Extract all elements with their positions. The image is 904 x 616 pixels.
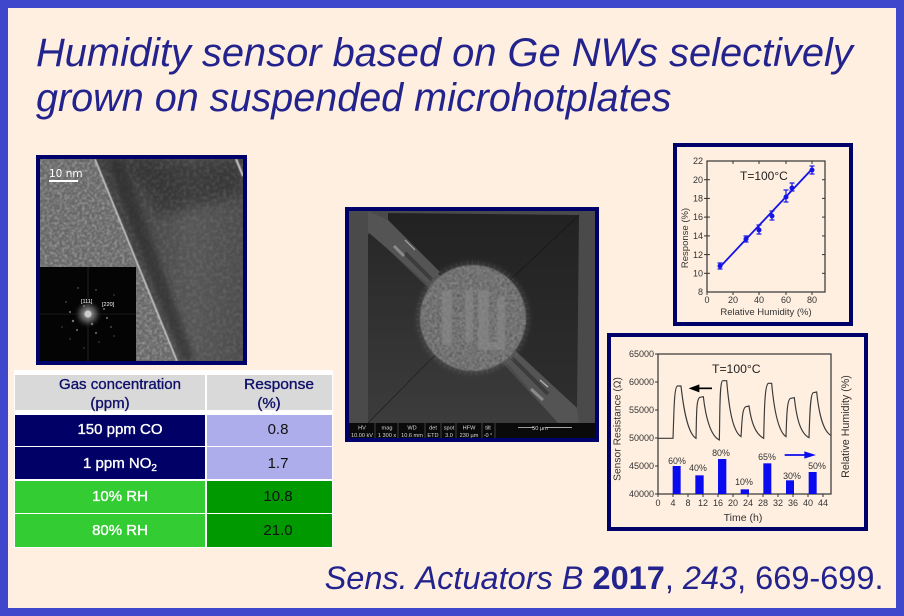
data bar: det xyxy=(429,426,437,432)
x axis title: Time (h) xyxy=(724,512,762,524)
x axis tick labels: 0 xyxy=(704,295,710,305)
x axis tick labels: 4 xyxy=(670,498,676,508)
data bar: HV xyxy=(358,426,366,432)
data bar: ETD xyxy=(427,433,439,439)
row: 1 ppm NO2: 2 xyxy=(151,463,157,474)
x axis tick labels: 16 xyxy=(713,498,723,508)
row: 150 ppm CO xyxy=(15,415,332,446)
data bar: mag xyxy=(382,426,392,432)
bar labels: 30% xyxy=(783,471,801,481)
x axis tick labels: 36 xyxy=(788,498,798,508)
humidity bars xyxy=(673,459,817,494)
data bar: 50 µm xyxy=(532,426,548,432)
row: 1 ppm NO2 xyxy=(15,447,332,479)
chart annotation: T=100°C xyxy=(712,362,761,376)
row: 150 ppm CO: 0.8 xyxy=(268,421,288,438)
data bar: -0 ° xyxy=(484,433,492,439)
x axis tick labels: 12 xyxy=(698,498,708,508)
table header: Gas concentration xyxy=(59,376,181,393)
y axis tick labels: 18 xyxy=(693,194,703,204)
left y axis title: Sensor Resistance (Ω) xyxy=(612,377,624,481)
x axis tick labels: 20 xyxy=(728,498,738,508)
y axis title: Response (%) xyxy=(680,208,691,268)
y axis tick labels: 16 xyxy=(693,212,703,222)
x axis tick labels: 44 xyxy=(818,498,828,508)
bar labels: 80% xyxy=(712,448,730,458)
bar labels: 65% xyxy=(758,452,776,462)
scale bar: 10 nm xyxy=(49,168,83,180)
data bar: 1 300 x xyxy=(378,433,396,439)
x axis tick labels: 0 xyxy=(655,498,661,508)
dark nanowire region xyxy=(95,159,243,361)
y axis tick labels: 65000 xyxy=(629,349,654,359)
row: 10% RH: 10% RH xyxy=(92,488,148,505)
y axis tick labels: 60000 xyxy=(629,377,654,387)
chart plot area xyxy=(680,156,825,318)
x axis tick labels xyxy=(704,295,817,305)
x axis tick labels: 20 xyxy=(728,295,738,305)
data bar: 3.0 xyxy=(445,433,453,439)
data bar: tilt xyxy=(485,426,491,432)
data bar: spot xyxy=(444,426,455,432)
y axis tick labels: 10 xyxy=(693,268,703,278)
row: 80% RH xyxy=(15,514,332,547)
y axis tick labels: 55000 xyxy=(629,405,654,415)
bar labels xyxy=(668,448,826,487)
x axis tick labels: 8 xyxy=(685,498,691,508)
title: Humidity sensor based on Ge NWs selectively xyxy=(36,31,855,75)
x axis tick labels: 60 xyxy=(781,295,791,305)
x axis tick labels: 32 xyxy=(773,498,783,508)
y axis tick labels: 20 xyxy=(693,175,703,185)
panel: response vs relative humidity chart xyxy=(675,145,851,324)
y axis tick labels xyxy=(693,156,703,297)
table: gas response xyxy=(14,370,333,548)
title: grown on suspended microhotplates xyxy=(36,76,671,120)
row: 1 ppm NO2: 1.7 xyxy=(268,455,288,472)
data bar: 10.00 kV xyxy=(351,433,373,439)
y axis tick labels: 22 xyxy=(693,156,703,166)
interdigitated electrodes xyxy=(442,290,505,350)
disc xyxy=(419,264,527,372)
diffraction inset: [220] xyxy=(102,302,115,308)
table header: Response xyxy=(244,376,314,393)
bar labels: 10% xyxy=(735,477,753,487)
row: 80% RH: 21.0 xyxy=(263,522,293,539)
window: upper right xyxy=(388,213,579,408)
table header: (ppm) xyxy=(90,395,130,412)
left arrow xyxy=(689,384,712,392)
y axis tick labels: 14 xyxy=(693,231,703,241)
panel: sensor resistance vs time chart xyxy=(609,335,866,529)
row: 1 ppm NO2: 1 ppm NO xyxy=(83,455,151,472)
x axis tick labels: 40 xyxy=(754,295,764,305)
dark band along wire edge xyxy=(106,159,195,361)
y axis tick labels: 12 xyxy=(693,250,703,260)
y axis tick labels: 45000 xyxy=(629,461,654,471)
data bar: WD xyxy=(407,426,417,432)
plot frame xyxy=(658,354,831,494)
right arrow xyxy=(785,451,816,459)
y axis tick labels xyxy=(629,349,654,499)
window: lower left xyxy=(368,232,558,423)
bar labels: 50% xyxy=(808,461,826,471)
diffraction inset: [111] xyxy=(81,299,93,305)
y axis tick labels: 8 xyxy=(698,287,703,297)
citation: Sens. Actuators B 2017, 243, 669-699. xyxy=(325,560,884,596)
data bar xyxy=(349,423,595,439)
x axis title: Relative Humidity (%) xyxy=(720,307,812,318)
x axis tick labels: 40 xyxy=(803,498,813,508)
right y axis title: Relative Humidity (%) xyxy=(840,375,852,478)
data bar: 230 µm xyxy=(460,433,479,439)
data bar: 10.6 mm xyxy=(401,433,423,439)
x axis tick labels: 24 xyxy=(743,498,753,508)
row: 10% RH xyxy=(15,481,332,513)
y axis tick labels: 50000 xyxy=(629,433,654,443)
resistance curve xyxy=(658,381,831,494)
x axis tick labels: 28 xyxy=(758,498,768,508)
row: 150 ppm CO: 150 ppm CO xyxy=(77,421,163,438)
fit line and data points xyxy=(718,166,814,269)
panel: TEM micrograph xyxy=(38,157,245,363)
bar labels: 60% xyxy=(668,456,686,466)
nanowire halo xyxy=(417,262,529,374)
light amorphous region xyxy=(40,159,177,361)
row: 80% RH: 80% RH xyxy=(92,522,148,539)
x axis tick labels xyxy=(655,498,828,508)
bright edge xyxy=(95,159,177,361)
arms xyxy=(368,211,579,423)
table header: (%) xyxy=(257,395,281,412)
data bar: HFW xyxy=(463,426,476,432)
bar labels: 40% xyxy=(689,463,707,473)
table header xyxy=(15,375,332,412)
panel: SEM micrograph of microhotplate xyxy=(347,209,597,440)
chart annotation: T=100°C xyxy=(740,169,788,183)
x axis tick labels: 80 xyxy=(807,295,817,305)
diffraction inset xyxy=(40,267,136,361)
row: 10% RH: 10.8 xyxy=(263,488,293,505)
y axis tick labels: 40000 xyxy=(629,489,654,499)
